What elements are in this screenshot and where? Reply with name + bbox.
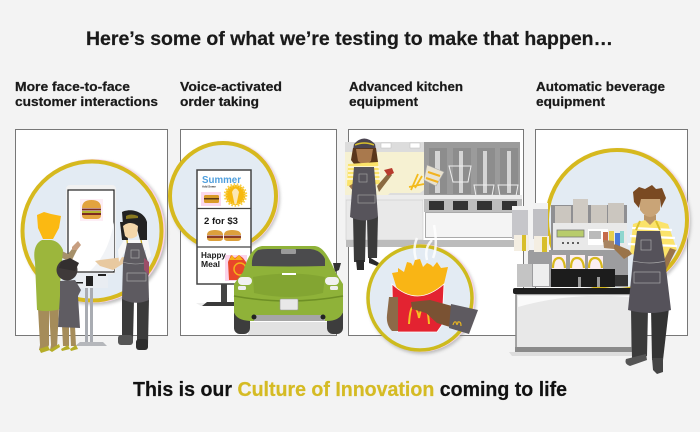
icon: burger xyxy=(80,199,103,221)
panel: beverage xyxy=(509,130,691,374)
menu board xyxy=(196,170,251,306)
fry box xyxy=(392,284,444,332)
heading: beverage: Automatic beverage xyxy=(536,80,665,94)
beverage employee xyxy=(603,185,677,374)
heading: kitchen: Advanced kitchen xyxy=(349,80,463,94)
woman customer xyxy=(34,212,81,353)
heading: face-to-face: customer interactions xyxy=(15,95,158,109)
hand and sleeve xyxy=(387,297,478,334)
icon: sun and cone xyxy=(226,185,246,205)
kiosk xyxy=(66,185,116,346)
icon: burger tray xyxy=(201,192,221,206)
kitchen equipment xyxy=(345,142,522,247)
icon: two burgers xyxy=(207,230,241,241)
highlight circle xyxy=(21,159,167,305)
title: Here’s some of what we’re testing to make that happen… xyxy=(86,28,613,50)
dispensers xyxy=(512,203,549,252)
heading: kitchen: equipment xyxy=(349,95,419,109)
menu text: summer: Summer xyxy=(202,175,241,186)
heading: beverage: equipment xyxy=(536,95,606,109)
child customer xyxy=(56,258,81,351)
menu text: price: 2 for $3 xyxy=(204,216,238,226)
heading: face-to-face: More face-to-face xyxy=(15,80,130,94)
menu text: happy meal: Happy xyxy=(201,251,227,260)
fries xyxy=(392,259,448,296)
golden arches xyxy=(409,307,429,324)
panel: face-to-face xyxy=(16,130,168,353)
employee xyxy=(95,210,151,350)
panel: voice ordering xyxy=(133,130,691,401)
steam xyxy=(414,225,436,262)
cups xyxy=(552,255,603,269)
highlight circle xyxy=(546,148,691,294)
kitchen employee xyxy=(347,138,394,270)
closing line: This is our Culture of Innovation coming to life xyxy=(133,379,567,401)
beverage counter xyxy=(509,288,633,356)
car xyxy=(234,246,343,335)
highlight circle: fries xyxy=(367,225,478,354)
beverage machine xyxy=(517,199,628,287)
panel: kitchen xyxy=(345,130,524,354)
heading: voice-activated: order taking xyxy=(180,95,259,109)
highlight circle xyxy=(169,141,280,253)
menu fine print: Add Some xyxy=(202,184,216,188)
heading: voice-activated: Voice-activated xyxy=(180,80,282,94)
icon: happy meal box xyxy=(225,255,247,281)
fry basket xyxy=(409,165,444,190)
menu text: happy meal: Meal xyxy=(201,260,220,269)
